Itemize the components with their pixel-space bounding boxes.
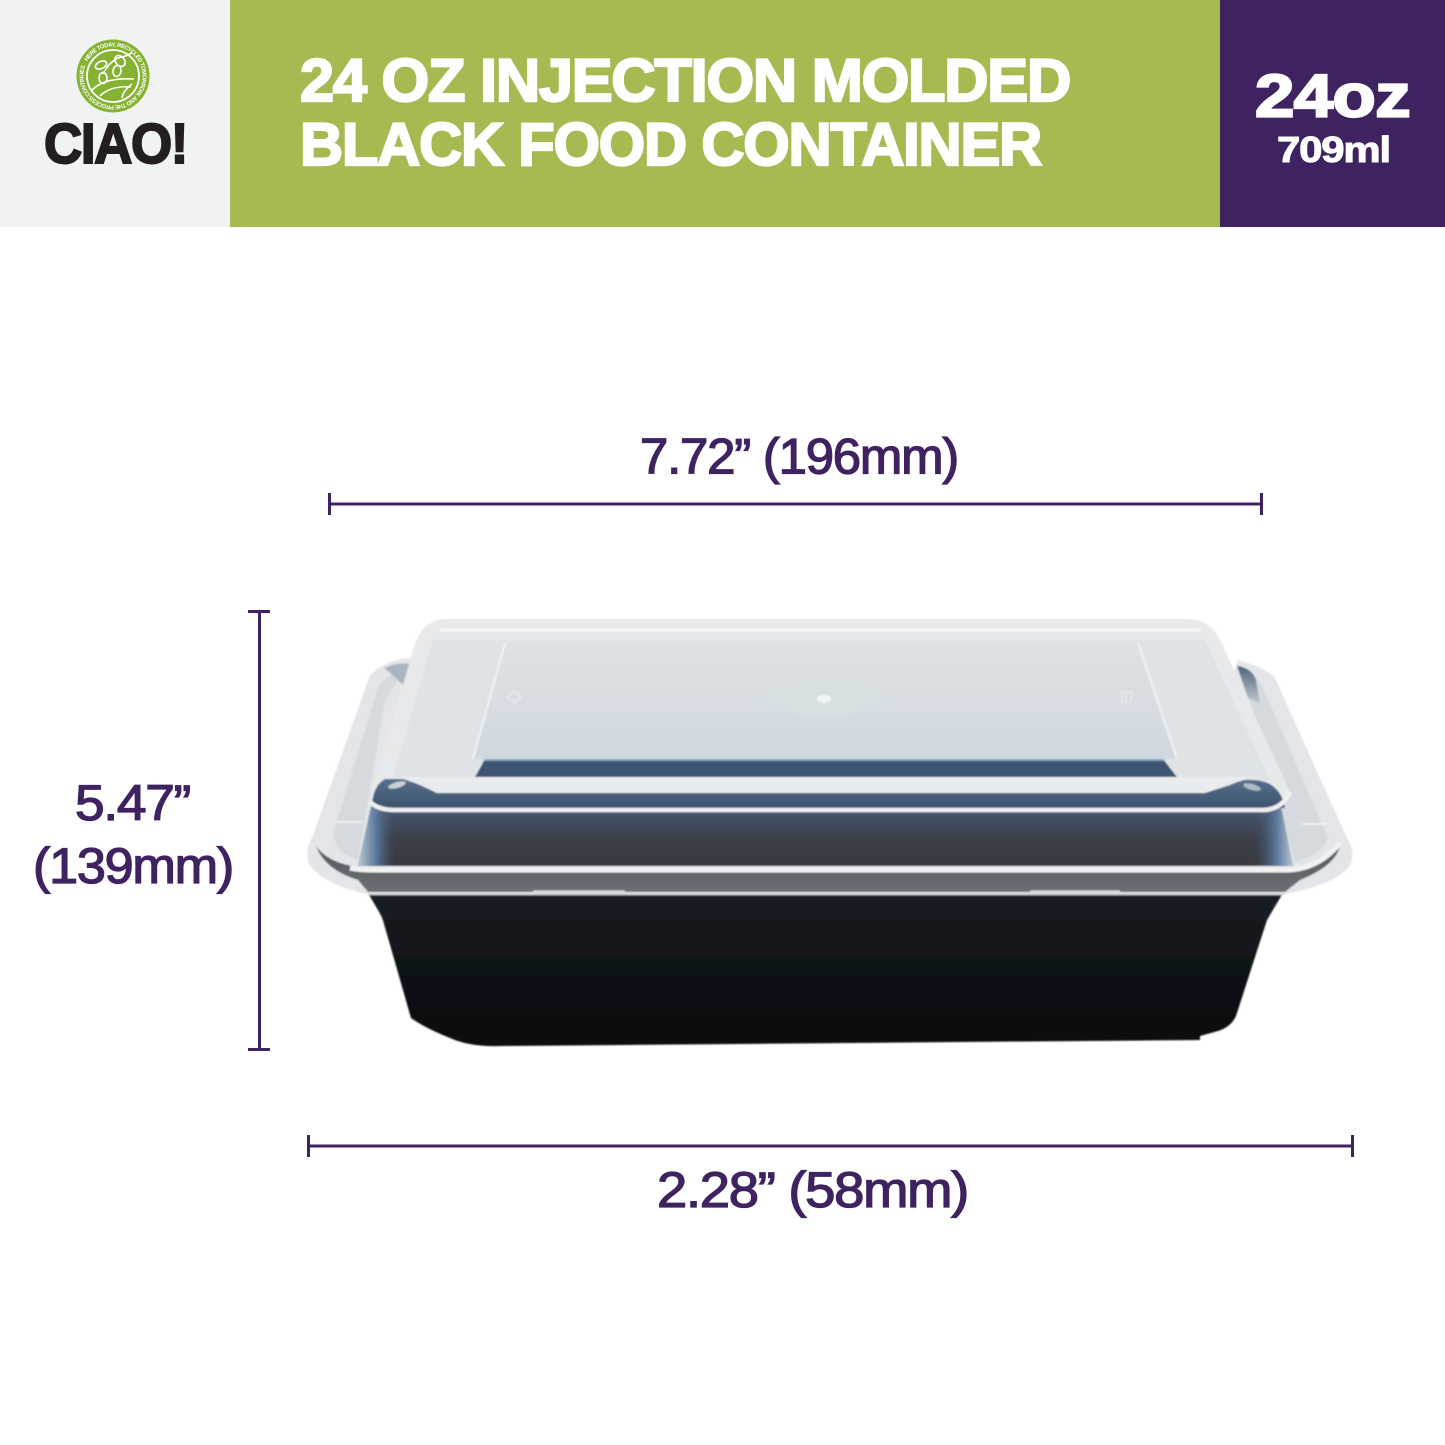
flange dark tabs seen through the lid (1237, 666, 1260, 704)
height dimension arrow (308, 1135, 1352, 1157)
lid dome side wall (358, 802, 1293, 866)
capacity label (1255, 62, 1410, 170)
title: BLACK FOOD CONTAINER (300, 111, 1042, 178)
capacity label: 709ml (1277, 129, 1390, 170)
panel: logo background (0, 0, 230, 227)
capacity label: 24oz (1255, 62, 1410, 130)
product photo: container with clear lid (307, 619, 1352, 1046)
panel: capacity background (1220, 0, 1445, 227)
top face panel (473, 643, 1177, 759)
blue strip (372, 779, 1285, 808)
dark slot (475, 759, 1177, 777)
length dimension label: (139mm) (33, 838, 233, 894)
flange inner shading (334, 670, 405, 860)
corner highlights (388, 780, 406, 790)
title (300, 47, 1070, 178)
translucent wall corners (358, 802, 396, 866)
light strip (395, 777, 1260, 793)
length dimension label: 5.47” (75, 775, 190, 831)
container base (368, 893, 1283, 1046)
icon: recycled badge logo: HERE TODAY, RECYCLED TOMORROW, AND THE PROCESS CONTINUES (79, 42, 147, 110)
lid flange (307, 658, 1352, 894)
length dimension arrow (248, 612, 270, 1050)
container upper lip (372, 895, 1281, 920)
molded recycling marks (507, 691, 521, 703)
center molded mark (764, 682, 884, 716)
length dimension label (33, 775, 233, 894)
height dimension label: 2.28” (58mm) (657, 1162, 968, 1218)
lid upper dome (371, 619, 1290, 803)
lid highlight lines (370, 792, 1290, 810)
width dimension arrow (330, 493, 1262, 515)
skirt band (316, 846, 1340, 892)
logo wordmark: CIAO! (44, 112, 187, 176)
title: 24 OZ INJECTION MOLDED (300, 47, 1070, 114)
panel: title background (230, 0, 1220, 227)
width dimension label: 7.72” (196mm) (640, 428, 958, 484)
top rim lines (440, 628, 1200, 632)
